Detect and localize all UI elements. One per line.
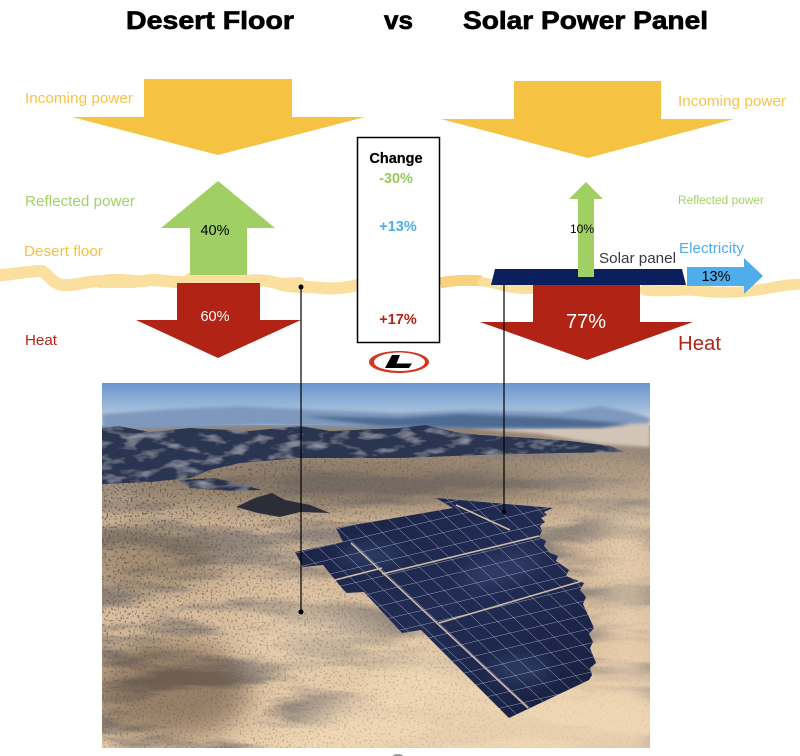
access roads xyxy=(335,505,582,708)
title: Desert Floor: Desert Floor xyxy=(126,7,294,35)
arrow: incoming power, desert xyxy=(72,79,365,155)
value: heat change: +17% xyxy=(379,312,417,328)
label: 10%: 10% xyxy=(570,222,594,236)
label: incoming power right: Incoming power xyxy=(678,94,786,110)
desert floor band xyxy=(0,271,800,292)
change box xyxy=(358,138,440,342)
foothill ridge xyxy=(178,478,262,491)
label: desert floor: Desert floor xyxy=(24,244,103,260)
title: Solar Power Panel: Solar Power Panel xyxy=(463,7,708,35)
value: reflected change: -30% xyxy=(379,171,413,187)
solar panel bar xyxy=(491,269,686,285)
pale far basin xyxy=(470,418,650,447)
arrow: heat, solar xyxy=(480,285,693,360)
cloud shadows and lit sand xyxy=(80,463,660,756)
leader line: solar panel to photo xyxy=(502,285,506,514)
label: heat left: Heat xyxy=(25,333,57,349)
arrow: heat, desert xyxy=(136,283,301,358)
heading: change: Change xyxy=(369,151,423,167)
label: 13%: 13% xyxy=(701,269,731,285)
solar array xyxy=(290,495,600,720)
arrow: reflected power, desert xyxy=(161,181,275,275)
title: vs: vs xyxy=(384,7,413,35)
photo: aerial view of solar farm in the desert xyxy=(80,383,660,756)
leader line: desert floor to photo xyxy=(298,284,304,614)
arrow: reflected power, solar xyxy=(569,182,603,277)
far mountains xyxy=(102,406,650,430)
label: reflected power left: Reflected power xyxy=(25,194,135,210)
label: 40%: 40% xyxy=(200,223,230,239)
label: 77%: 77% xyxy=(566,311,606,333)
label: solar panel: Solar panel xyxy=(599,251,676,267)
label: heat right: Heat xyxy=(678,333,721,355)
dark mountain range xyxy=(102,425,625,484)
value: electricity change: +13% xyxy=(379,219,417,235)
label: 60%: 60% xyxy=(200,309,230,325)
label: electricity: Electricity xyxy=(679,241,745,257)
sky xyxy=(102,383,650,423)
logo xyxy=(369,351,429,373)
desert ground xyxy=(102,425,650,748)
arrow: electricity xyxy=(687,258,763,294)
label: reflected power right: Reflected power xyxy=(678,195,764,207)
stray mark under photo xyxy=(393,754,403,756)
arrow: incoming power, solar xyxy=(441,81,734,158)
label: incoming power left: Incoming power xyxy=(25,91,133,107)
